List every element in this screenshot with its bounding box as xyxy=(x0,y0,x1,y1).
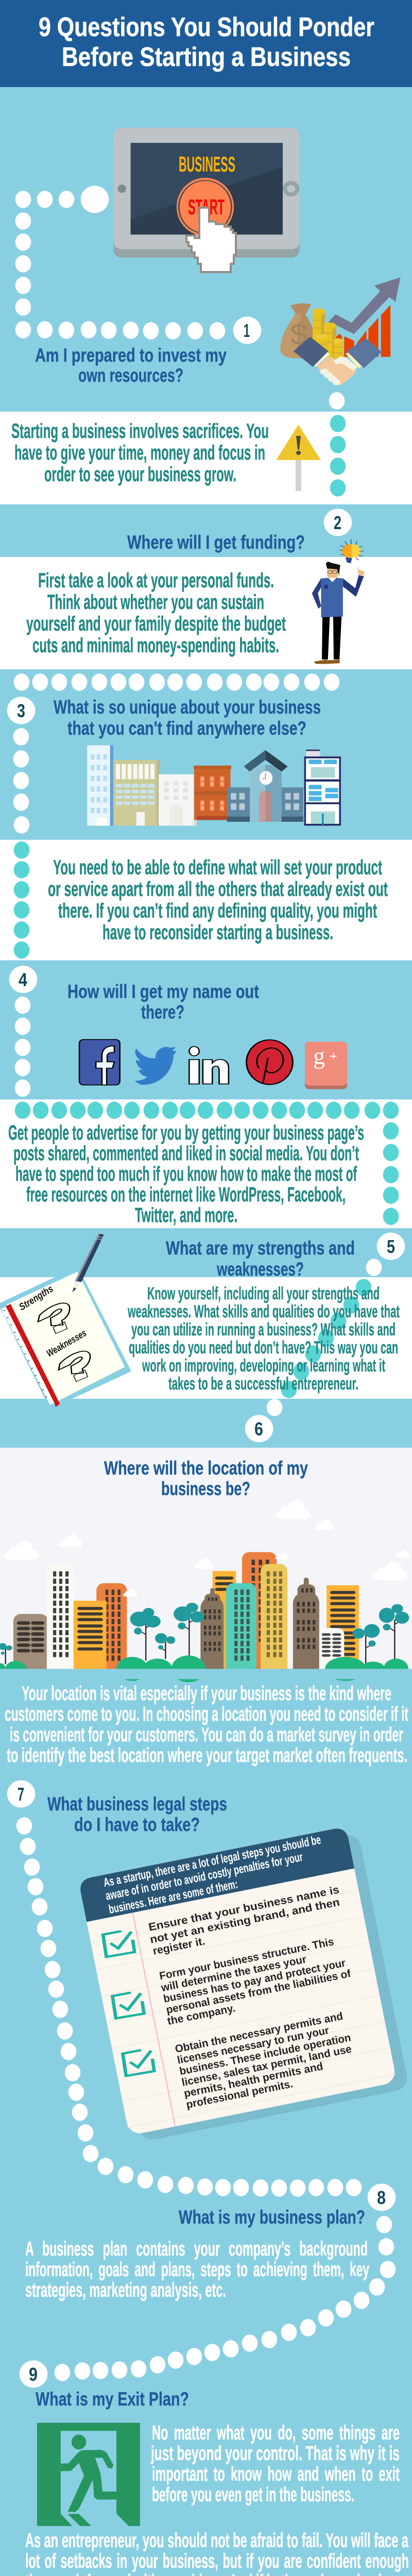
body text: funding xyxy=(26,569,286,657)
badge 5: 5 xyxy=(387,1236,395,1257)
body text: sacrifices: order to see your business grow. xyxy=(44,463,236,486)
icon: money bag, chart and handshake: $ xyxy=(290,318,307,351)
heading: question 7 xyxy=(47,1793,227,1835)
icon: google plus xyxy=(305,1042,347,1089)
body text: exit plan detail xyxy=(25,2530,409,2576)
step 3 text: business. These include operation xyxy=(178,2031,352,2077)
badge 5 xyxy=(377,1232,405,1260)
badge 7 xyxy=(7,1781,35,1807)
body text: what sets you apart xyxy=(48,856,388,944)
badge 1 xyxy=(233,316,261,344)
icon: linkedin xyxy=(189,1046,229,1084)
step 3 text: permits, health permits and xyxy=(183,2060,324,2100)
heading: question 2: Where will I get funding? xyxy=(127,532,305,553)
body text: funding: Think about whether you can sustain xyxy=(47,591,264,614)
icon: facebook xyxy=(79,1040,120,1085)
illustration: notebook and pencil: Strengths xyxy=(18,1283,55,1313)
heading: question 6: Where will the location of my xyxy=(104,1458,308,1479)
heading: question 5: weaknesses? xyxy=(216,1259,304,1280)
step 2 text: personal assets from the liabilities of xyxy=(165,1968,352,2016)
heading: question 4 xyxy=(67,981,259,1023)
icon: man with light bulb xyxy=(312,539,365,664)
icon: exit sign xyxy=(37,2423,140,2526)
tablet screen labels: START xyxy=(188,195,225,219)
badge 8 xyxy=(368,2183,396,2211)
step 3 text: license, sales tax permit, land use xyxy=(181,2043,353,2089)
heading: question 1: Am I prepared to invest my xyxy=(35,345,227,366)
icons: social media xyxy=(79,1040,347,1089)
step 1 text xyxy=(147,1884,345,1957)
body text: advertising xyxy=(8,1122,364,1227)
heading: question 5: What are my strengths and xyxy=(166,1238,355,1259)
heading: question 4: How will I get my name out xyxy=(67,981,259,1002)
step 3 text: Obtain the necessary permits and xyxy=(174,2010,344,2055)
badge 6 xyxy=(245,1415,273,1443)
step 2 text: business has to pay and protect your xyxy=(162,1957,347,2005)
badge 3 xyxy=(7,697,35,724)
heading: question 3: that you can't find anywhere else? xyxy=(67,718,306,739)
title: Before Starting a Business xyxy=(62,42,351,72)
step 1 text: Ensure that your business name is xyxy=(148,1884,340,1934)
title xyxy=(39,12,374,72)
icon: pixel hand pointer xyxy=(186,208,236,272)
illustration: city skyline xyxy=(0,1500,412,1682)
step 3 text xyxy=(174,2009,358,2111)
body text: location xyxy=(5,1683,408,1767)
icon: google plus: + xyxy=(330,1048,337,1064)
illustration: row of buildings xyxy=(87,745,341,826)
card intro text: aware of in order to avoid costly penalties for your xyxy=(105,1850,304,1903)
heading: question 5 xyxy=(166,1238,355,1280)
badge 8: 8 xyxy=(377,2187,386,2208)
body text: exit plan intro xyxy=(150,2422,400,2506)
heading: question 6: business be? xyxy=(161,1478,250,1499)
icons: check boxes xyxy=(103,1931,154,2076)
step 2 text xyxy=(158,1934,354,2027)
body text: advertising: Twitter, and more. xyxy=(135,1204,237,1227)
badge 2 xyxy=(324,509,352,536)
heading: question 7: What business legal steps xyxy=(47,1793,227,1815)
heading: question 1: own resources? xyxy=(78,365,183,386)
illustration: notebook and pencil: Weaknesses xyxy=(45,1328,89,1359)
icon: pinterest xyxy=(247,1040,293,1084)
step 3 text: licenses necessary to run your xyxy=(176,2025,330,2066)
illustration: notebook and pencil xyxy=(0,1233,131,1409)
step 1 text: not yet an existing brand, and then xyxy=(149,1896,341,1946)
tablet screen labels xyxy=(179,152,235,219)
body text: business plan xyxy=(25,2238,369,2301)
icon: google plus: g xyxy=(313,1043,325,1069)
dotted path: white dots on blue xyxy=(13,185,396,2381)
step 2 text: the company. xyxy=(166,2002,236,2027)
step 2 text: will determine the taxes your xyxy=(160,1953,307,1994)
heading: question 3: What is so unique about your business xyxy=(54,697,321,718)
step 2 text: Form your business structure. This xyxy=(158,1936,335,1982)
heading: question 1 xyxy=(35,345,227,386)
badge 2: 2 xyxy=(334,512,341,533)
body text: business plan: strategies, marketing analysis, etc. xyxy=(25,2279,226,2301)
icon: warning sign xyxy=(277,426,320,491)
icon: tablet with start button and pointer xyxy=(113,128,300,258)
badge 3: 3 xyxy=(17,700,25,721)
body text: sacrifices xyxy=(11,420,269,486)
tablet screen labels: BUSINESS xyxy=(179,152,235,176)
heading: question 3 xyxy=(54,697,321,739)
badge 7: 7 xyxy=(18,1784,24,1805)
badge 9: 9 xyxy=(29,2364,38,2385)
body text: strengths and weaknesses xyxy=(127,1284,400,1394)
step 1 text: register it. xyxy=(152,1935,206,1957)
badge 4: 4 xyxy=(19,969,27,990)
badge 1: 1 xyxy=(244,320,250,341)
panel: legal steps card xyxy=(78,1826,409,2142)
step 3 text: professional permits. xyxy=(185,2078,294,2111)
heading: question 9: What is my Exit Plan? xyxy=(36,2388,189,2410)
icon: twitter xyxy=(135,1047,177,1085)
card intro text xyxy=(102,1833,328,1917)
card intro text: business. Here are some of them: xyxy=(108,1877,239,1917)
dotted path: teal dots on white xyxy=(14,415,399,1398)
heading: question 7: do I have to take? xyxy=(74,1814,200,1835)
badge 9 xyxy=(20,2361,47,2387)
icon: money bag, chart and handshake xyxy=(280,277,401,385)
badge 4 xyxy=(9,965,37,993)
badge 6: 6 xyxy=(254,1418,263,1439)
heading: question 6 xyxy=(104,1458,308,1499)
heading: question 4: there? xyxy=(141,1002,184,1023)
